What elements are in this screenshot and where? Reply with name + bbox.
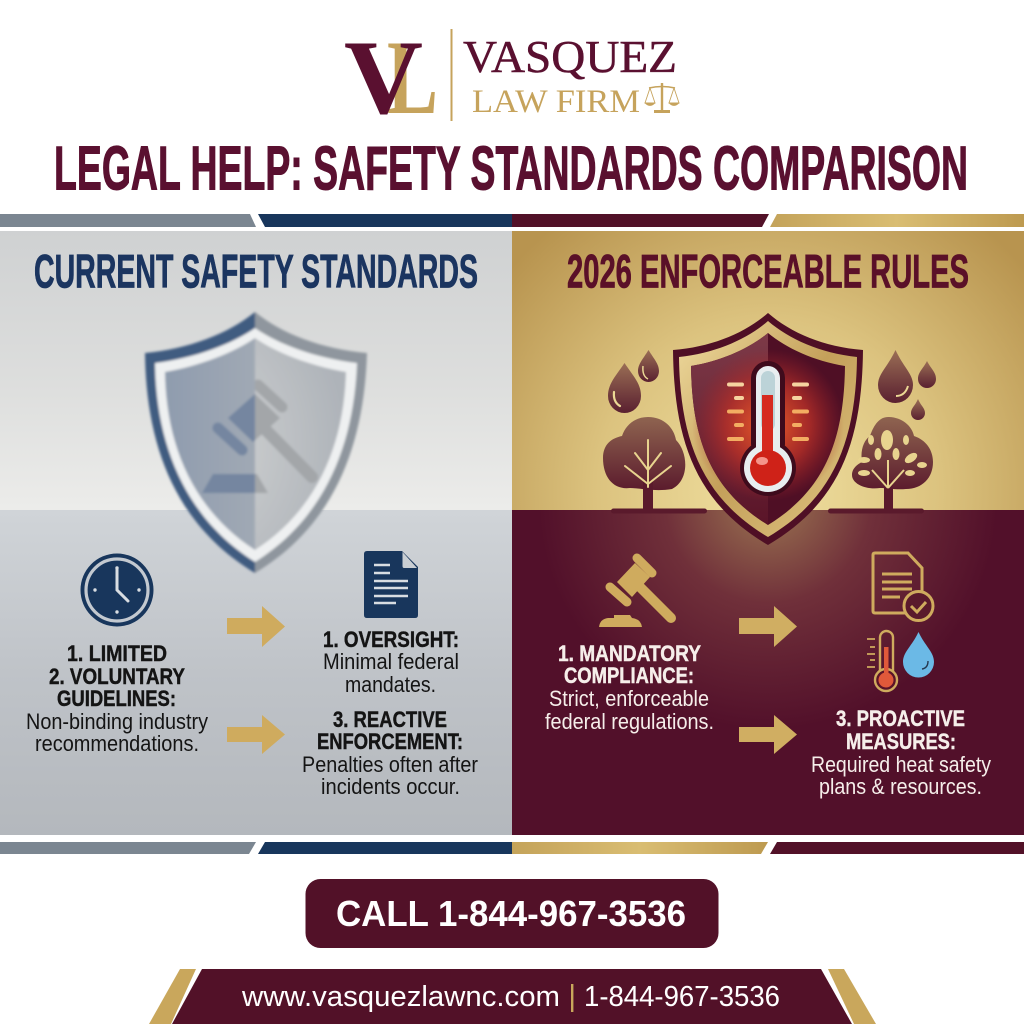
text: limited / voluntary guidelines: Non-binding industry — [26, 709, 208, 734]
text: reactive enforcement: ENFORCEMENT: — [317, 729, 463, 754]
panel: current safety standards — [0, 231, 512, 835]
text: limited / voluntary guidelines — [26, 641, 208, 756]
text: reactive enforcement: 3. REACTIVE — [333, 707, 447, 732]
footer banner: 1-844-967-3536 — [584, 981, 780, 1013]
icon: left tree — [603, 417, 707, 514]
text: proactive measures: MEASURES: — [846, 729, 956, 754]
text: mandatory compliance: COMPLIANCE: — [564, 663, 694, 688]
arrow: upper right — [739, 606, 797, 647]
text: reactive enforcement — [302, 707, 478, 799]
text: oversight: 1. OVERSIGHT: — [323, 627, 459, 652]
text: proactive measures: Required heat safety — [811, 752, 991, 777]
icon: right tree — [828, 417, 933, 514]
footer banner: www.vasquezlawnc.com — [241, 981, 560, 1013]
icon: document with check — [873, 553, 933, 620]
text: mandatory compliance: Strict, enforceable — [549, 686, 709, 711]
panel: 2026 enforceable rules — [512, 231, 1024, 835]
logo: Vasquez Law Firm: V — [344, 19, 423, 136]
icon: shield with thermometer — [673, 313, 863, 545]
logo: Vasquez Law Firm: LAW FIRM — [472, 84, 640, 120]
top colour strip — [0, 214, 1024, 227]
text: limited / voluntary guidelines: 1. LIMITED — [67, 641, 167, 666]
text: limited / voluntary guidelines: GUIDELINES: — [57, 686, 176, 711]
logo: Vasquez Law Firm: L — [387, 19, 438, 136]
call button: CALL 1-844-967-3536 — [336, 893, 686, 934]
icon: blurred shield with gavel — [145, 312, 367, 573]
text: proactive measures — [811, 706, 991, 799]
text: mandatory compliance: 1. MANDATORY — [558, 641, 701, 666]
icon: gavel — [599, 558, 671, 627]
icon: water drops right — [878, 350, 936, 420]
call button — [306, 879, 718, 948]
heading: current safety standards: CURRENT SAFETY STANDARDS — [34, 244, 478, 298]
arrow: upper left — [227, 606, 285, 647]
arrow: lower left — [227, 715, 285, 754]
text: oversight — [323, 627, 459, 697]
logo: Vasquez Law Firm — [344, 19, 679, 136]
icon: thermometer — [867, 631, 897, 691]
text: mandatory compliance — [545, 641, 714, 734]
text: proactive measures: 3. PROACTIVE — [836, 706, 965, 731]
bottom colour strip — [0, 842, 1024, 854]
text: mandatory compliance: federal regulations. — [545, 709, 714, 734]
text: reactive enforcement: incidents occur. — [321, 774, 460, 799]
logo: Vasquez Law Firm: VASQUEZ — [463, 32, 677, 82]
text: limited / voluntary guidelines: 2. VOLUNTARY — [49, 664, 185, 689]
text: oversight: mandates. — [345, 672, 436, 697]
arrow: lower right — [739, 715, 797, 754]
text: limited / voluntary guidelines: recommendations. — [35, 731, 199, 756]
text: reactive enforcement: Penalties often after — [302, 752, 478, 777]
icon: water drop — [903, 632, 934, 677]
icon: document — [364, 551, 418, 618]
icon: clock — [80, 554, 154, 626]
text: proactive measures: plans & resources. — [819, 774, 982, 799]
icon: water drops left — [608, 350, 659, 413]
text: oversight: Minimal federal — [323, 649, 459, 674]
footer banner — [149, 969, 876, 1024]
